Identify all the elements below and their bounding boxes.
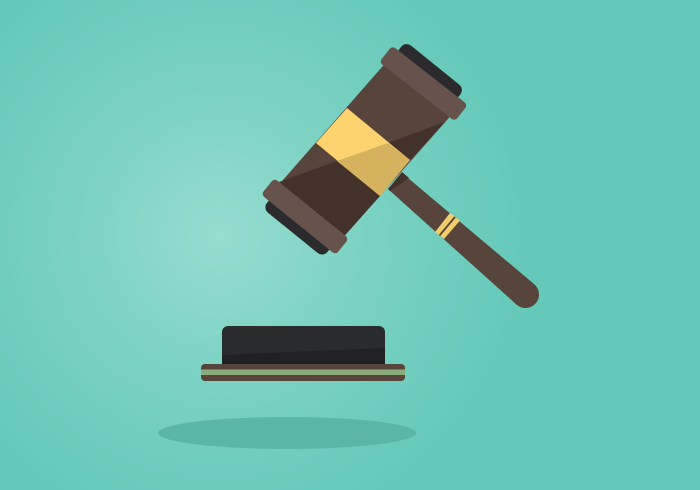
gold band: [316, 108, 410, 196]
upper cap: [379, 46, 468, 121]
hammer body: [279, 62, 451, 238]
ground shadow: [158, 417, 416, 449]
handle stripes: [435, 213, 460, 239]
lower cap: [261, 178, 349, 255]
handle: [388, 172, 539, 308]
block base plank: [201, 364, 405, 381]
gavel: [261, 41, 539, 308]
block top: [222, 326, 385, 366]
sound block: [201, 326, 405, 381]
hammer rear faces: [263, 41, 465, 257]
